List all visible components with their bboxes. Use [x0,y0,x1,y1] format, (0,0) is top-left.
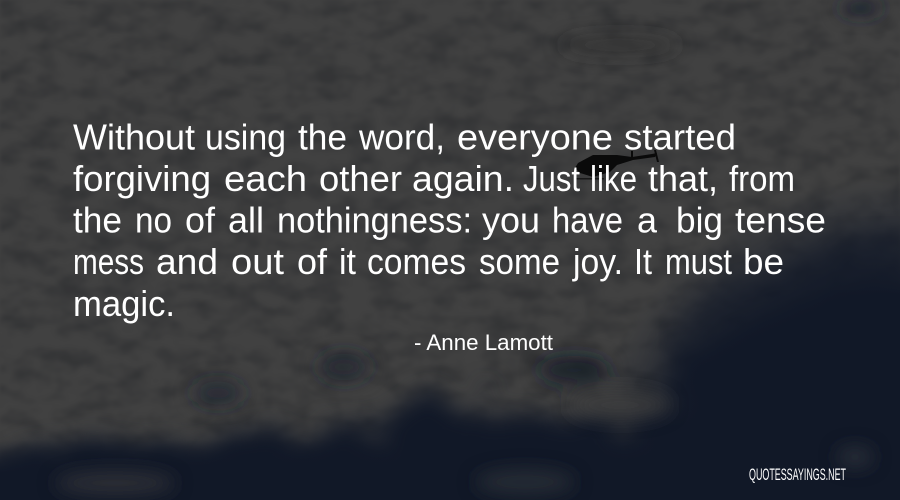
quote text: comes [367,241,466,282]
quote text: some [479,241,560,282]
quote text: again. [412,158,514,199]
quote text: from [729,158,795,199]
quote text: that, [648,158,718,199]
quote text: Just [523,158,580,199]
quote text: it [339,241,356,282]
quote text: everyone [457,116,613,158]
quote text: like [590,158,637,199]
quote text: big [676,200,723,240]
quote text: no [135,200,172,240]
attribution: - Anne Lamott [414,330,553,355]
quote text: of [297,241,328,282]
quote text: other [319,158,402,199]
quote text: nothingness: [277,200,472,240]
quote text: the [73,200,122,240]
quote text [73,116,826,324]
quote text: joy. [572,241,623,282]
quote text: started [624,116,736,158]
quote text: forgiving [73,158,211,199]
quote text: mess [73,241,144,282]
icon: helicopter silhouette [574,150,659,180]
quote text: and [156,241,218,282]
quote text: have [552,200,623,240]
quote text: must [665,241,732,282]
quote text: using [205,116,286,158]
quote text: each [224,158,307,199]
quote text: out [231,241,284,282]
quote text: word, [358,116,445,158]
quote text: Without [73,116,195,158]
quote text: a [637,200,658,240]
quote text: all [228,200,264,240]
quote text: of [185,200,216,240]
quote text: be [743,241,784,282]
quote text: It [634,241,652,282]
quote text: the [298,116,347,158]
quote text: tense [735,200,826,240]
quote text: magic. [73,283,175,324]
quote text: you [482,200,540,240]
